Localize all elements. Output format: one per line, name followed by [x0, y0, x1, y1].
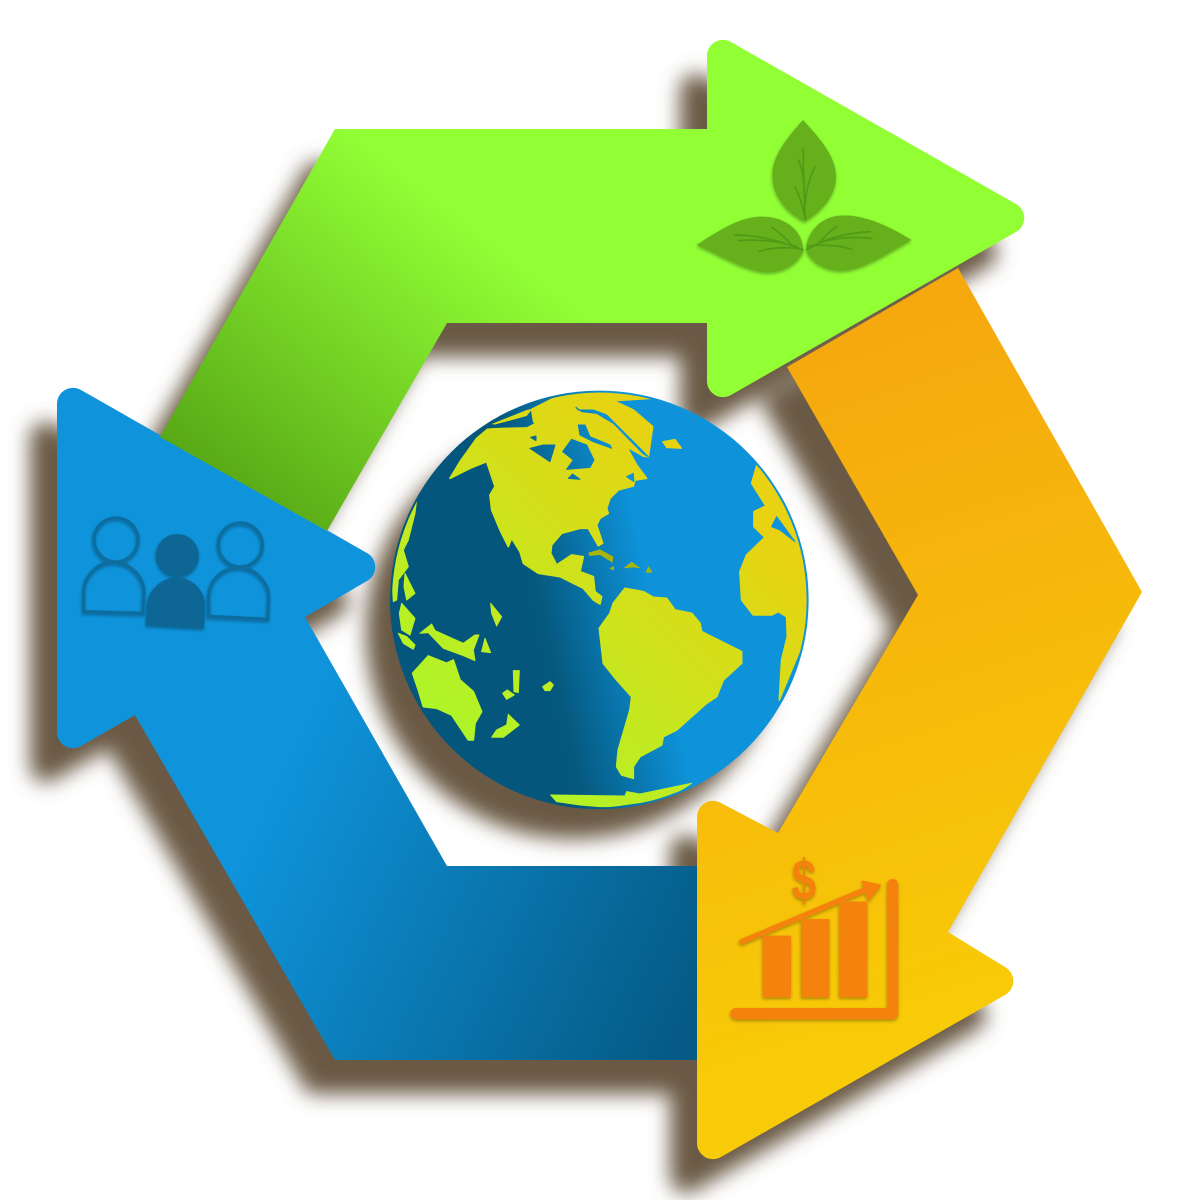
- icon: leaves: [697, 120, 912, 272]
- asia and pacific islands: [392, 500, 553, 737]
- ocean: [390, 391, 809, 809]
- greenland side island: [663, 439, 682, 448]
- axes: [736, 885, 893, 1014]
- icon: three people: [84, 518, 269, 629]
- australia: [413, 656, 482, 740]
- trend arrow: [742, 882, 880, 942]
- africa and europe: [740, 466, 808, 700]
- arrow: green environment: [160, 40, 1024, 531]
- caribbean islands: [588, 549, 653, 573]
- arrow: orange economy: [697, 268, 1142, 1159]
- land masses: [392, 392, 808, 807]
- bars: [763, 902, 867, 997]
- dollar sign: $: [792, 848, 816, 912]
- south america: [599, 588, 742, 778]
- mediterranean: [772, 517, 795, 542]
- arctic strip: [492, 409, 533, 425]
- arrow: blue people: [57, 388, 697, 1060]
- arctic channels and bays: [493, 407, 648, 482]
- north america and greenland: [450, 392, 653, 604]
- antarctica: [551, 783, 692, 807]
- icon: growth chart with dollar: [736, 848, 893, 1014]
- globe: [390, 391, 809, 809]
